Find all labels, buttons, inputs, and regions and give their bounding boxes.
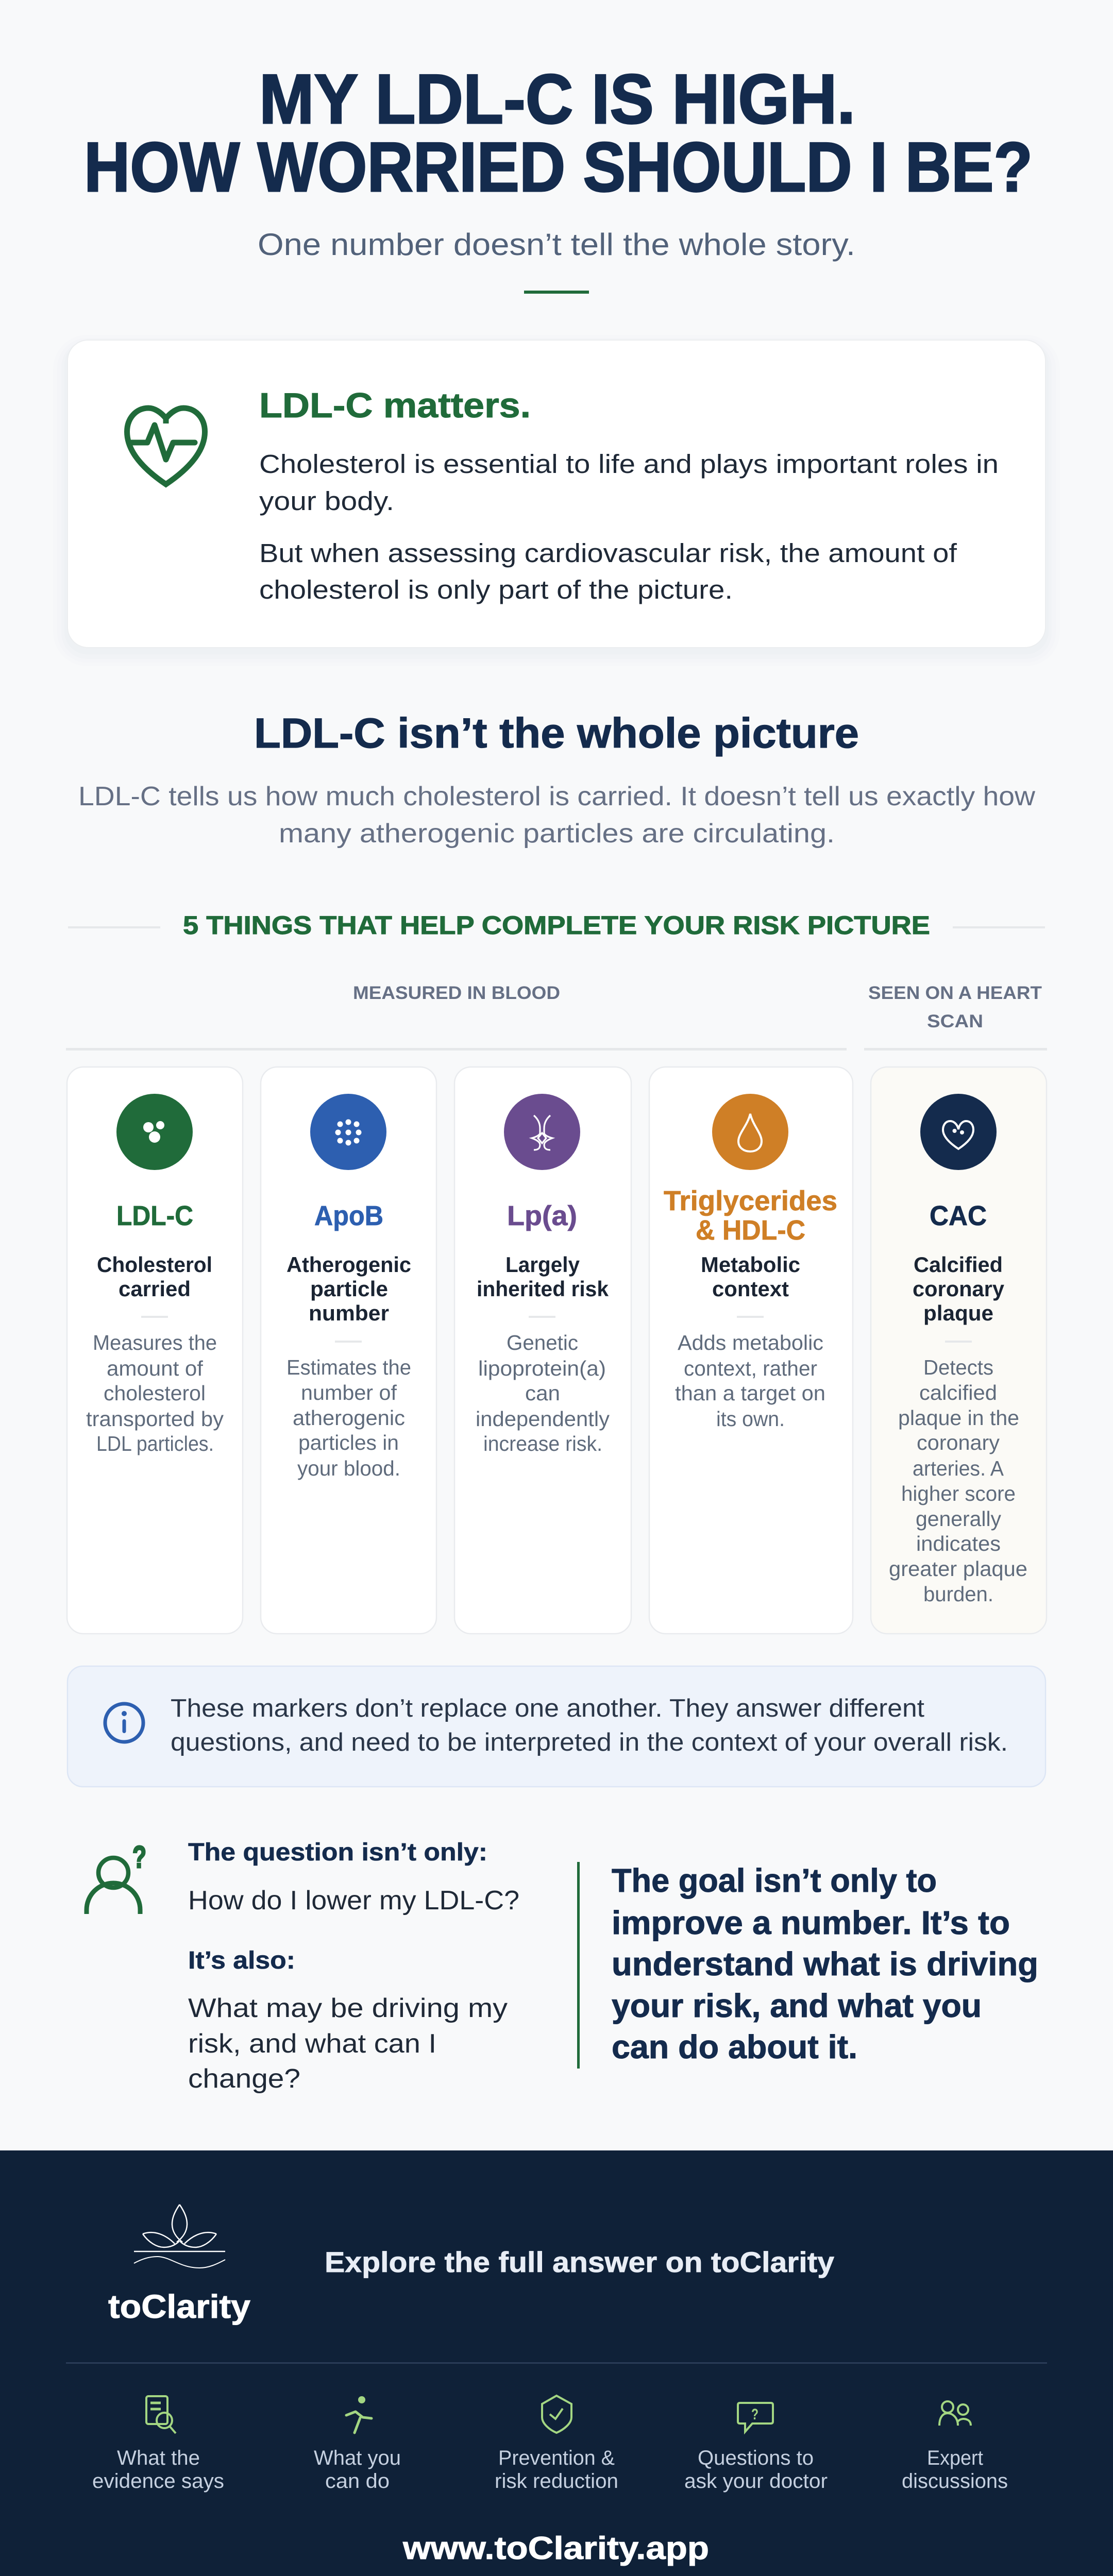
card description: calcified: [919, 1381, 997, 1404]
card subtitle: particle: [310, 1277, 388, 1301]
icon: running figure: [346, 2396, 372, 2433]
card: Lp(a): [454, 1067, 631, 1634]
card description: can: [525, 1381, 560, 1405]
item: what the evidence says: [92, 2396, 224, 2493]
icon: droplet: [712, 1094, 788, 1170]
label: What the: [117, 2447, 200, 2469]
group label: seen on a heart scan: SEEN ON A HEART: [868, 983, 1042, 1003]
icon: calcified heart: [920, 1094, 997, 1170]
card description: transported by: [86, 1407, 224, 1431]
group label: seen on a heart scan: SCAN: [927, 1011, 983, 1031]
text block: the goal statement: [612, 1862, 1038, 2065]
card: ApoB: [261, 1067, 436, 1634]
label: [92, 2447, 224, 2493]
card description: amount of: [107, 1357, 204, 1380]
label: [684, 2447, 828, 2493]
card name: [664, 1185, 837, 1246]
text block: cholesterol body copy: Cholesterol is essential to life and plays important roles in: [259, 449, 999, 479]
section heading: 5 things: 5 THINGS THAT HELP COMPLETE YOUR RISK PICTURE: [183, 911, 930, 940]
card description: indicates: [916, 1532, 1001, 1555]
card description: Genetic: [507, 1331, 578, 1354]
panel: toClarity call to action: [0, 2150, 1113, 2576]
text block: intro paragraph: many atherogenic particles are circulating.: [279, 819, 835, 849]
card subtitle: carried: [119, 1277, 191, 1301]
icon: speech bubble with question: ?: [751, 2406, 758, 2423]
card description: Measures the: [93, 1331, 217, 1354]
card description: greater plaque: [889, 1557, 1027, 1581]
text block: cholesterol body copy: cholesterol is only part of the picture.: [259, 575, 733, 604]
card description: its own.: [716, 1407, 785, 1431]
card name: CAC: [930, 1200, 987, 1231]
text block: cholesterol body copy: But when assessing cardiovascular risk, the amount of: [259, 538, 957, 568]
icon: document and magnifier: [146, 2396, 176, 2433]
text block: cholesterol body copy: [259, 449, 999, 604]
text block: the goal statement: your risk, and what you: [612, 1987, 982, 2024]
label: Questions to: [698, 2447, 814, 2469]
icon: two people: [939, 2401, 971, 2426]
icon: shield with check: [542, 2396, 571, 2433]
text block: the question: The question isn’t only:: [188, 1839, 487, 1866]
text block: the goal statement: improve a number. It’s to: [612, 1904, 1010, 1941]
logo: toClarity: toClarity: [108, 2288, 250, 2325]
label: Expert: [927, 2447, 983, 2469]
callout text: questions, and need to be interpreted in the context of your overall risk.: [171, 1728, 1008, 1756]
title: HOW WORRIED SHOULD I BE?: [84, 128, 1033, 206]
card subtitle: context: [712, 1277, 789, 1301]
card subtitle: [97, 1252, 212, 1301]
icon: info: [105, 1704, 143, 1742]
text block: the question: What may be driving my: [188, 1993, 508, 2023]
card subtitle: Largely: [505, 1252, 580, 1277]
card description: [86, 1331, 224, 1455]
card: LDL-C: [67, 1067, 243, 1634]
card subtitle: [286, 1252, 411, 1325]
label: evidence says: [92, 2470, 224, 2493]
panel: LDL-C matters: [53, 335, 1060, 666]
icon: particle dots: [310, 1094, 386, 1170]
card name: Lp(a): [507, 1200, 577, 1231]
card subtitle: [701, 1252, 800, 1301]
label: ask your doctor: [684, 2470, 828, 2493]
card subtitle: [913, 1252, 1005, 1325]
label: Prevention &: [498, 2447, 615, 2469]
card description: plaque in the: [898, 1406, 1019, 1430]
label: [902, 2447, 1008, 2493]
icon: person with question mark: ?: [132, 1840, 146, 1874]
label: [314, 2447, 401, 2493]
card description: [675, 1331, 825, 1431]
card description: coronary: [917, 1431, 1000, 1454]
icon: speech bubble with question: [738, 2403, 773, 2432]
card name: & HDL-C: [696, 1215, 805, 1246]
group label: measured in blood: MEASURED IN BLOOD: [353, 983, 560, 1003]
callout: markers note: [68, 1666, 1045, 1787]
group label: seen on a heart scan: [868, 983, 1042, 1031]
heading: LDL-C matters: LDL-C matters.: [259, 386, 531, 425]
icon: heart with pulse: [127, 408, 205, 484]
item: expert discussions: [902, 2401, 1008, 2493]
card subtitle: coronary: [913, 1277, 1005, 1301]
card description: Adds metabolic: [678, 1331, 823, 1354]
icon: person with question mark: [87, 1840, 146, 1914]
logo: toClarity: [108, 2205, 250, 2325]
label: discussions: [902, 2470, 1008, 2493]
card: Triglycerides and HDL-C: [649, 1067, 853, 1634]
title: MY LDL-C IS HIGH.: [259, 60, 855, 138]
card name: ApoB: [314, 1200, 383, 1231]
label: What you: [314, 2447, 401, 2469]
card subtitle: plaque: [923, 1301, 993, 1325]
callout text: These markers don’t replace one another. They answer different: [171, 1694, 924, 1722]
text block: the question: [188, 1839, 519, 2094]
card name: Triglycerides: [664, 1185, 837, 1216]
card description: increase risk.: [483, 1432, 602, 1455]
card description: [889, 1355, 1027, 1606]
card description: cholesterol: [104, 1381, 206, 1405]
card description: than a target on: [675, 1381, 825, 1405]
card description: atherogenic: [293, 1406, 405, 1430]
card description: generally: [916, 1507, 1001, 1531]
item: what you can do: [314, 2396, 401, 2493]
card name: LDL-C: [116, 1200, 193, 1231]
card subtitle: number: [309, 1301, 389, 1325]
text block: the goal statement: can do about it.: [612, 2028, 857, 2065]
card description: arteries. A: [913, 1456, 1004, 1480]
card description: lipoprotein(a): [478, 1357, 606, 1380]
card description: LDL particles.: [96, 1432, 214, 1455]
card description: particles in: [298, 1431, 399, 1454]
website url: www.toClarity.app: [402, 2531, 709, 2566]
text block: the question: risk, and what can I: [188, 2029, 436, 2059]
card description: independently: [476, 1407, 610, 1431]
text block: the goal statement: understand what is driving: [612, 1945, 1038, 1982]
label: [495, 2447, 618, 2493]
card subtitle: Calcified: [914, 1252, 1003, 1277]
card description: [286, 1355, 411, 1480]
card description: your blood.: [297, 1456, 400, 1480]
icon: genetic helix: [504, 1094, 580, 1170]
item: questions to ask your doctor: [684, 2403, 828, 2493]
label: risk reduction: [495, 2470, 618, 2493]
text block: the question: How do I lower my LDL-C?: [188, 1886, 519, 1916]
card subtitle: Cholesterol: [97, 1252, 212, 1277]
card subtitle: Metabolic: [701, 1252, 800, 1277]
text block: the question: change?: [188, 2064, 300, 2094]
heading: explore the full answer: Explore the full answer on toClarity: [325, 2246, 834, 2278]
label: can do: [325, 2470, 390, 2493]
card description: Detects: [923, 1355, 993, 1379]
card subtitle: [477, 1252, 609, 1301]
card: CAC: [871, 1067, 1047, 1634]
title: [84, 60, 1033, 206]
subtitle: One number doesn’t tell the whole story.: [258, 227, 855, 262]
card subtitle: Atherogenic: [286, 1252, 411, 1277]
card description: number of: [301, 1381, 397, 1404]
text block: the question: It’s also:: [188, 1947, 295, 1974]
card description: context, rather: [684, 1357, 817, 1380]
icon: cholesterol particles: [116, 1094, 193, 1170]
card description: [476, 1331, 610, 1455]
item: prevention and risk reduction: [495, 2396, 618, 2493]
card description: burden.: [923, 1582, 993, 1606]
callout text: [171, 1694, 1008, 1756]
text block: intro paragraph: LDL-C tells us how much cholesterol is carried. It doesn’t tell us exactly how: [78, 782, 1035, 811]
card description: Estimates the: [286, 1355, 411, 1379]
text block: intro paragraph: [78, 782, 1035, 849]
heading: LDL-C isn't the whole picture: LDL-C isn’t the whole picture: [254, 710, 859, 757]
card description: higher score: [901, 1482, 1016, 1505]
card subtitle: inherited risk: [477, 1277, 609, 1301]
text block: the goal statement: The goal isn’t only to: [612, 1862, 937, 1899]
text block: cholesterol body copy: your body.: [259, 486, 394, 516]
